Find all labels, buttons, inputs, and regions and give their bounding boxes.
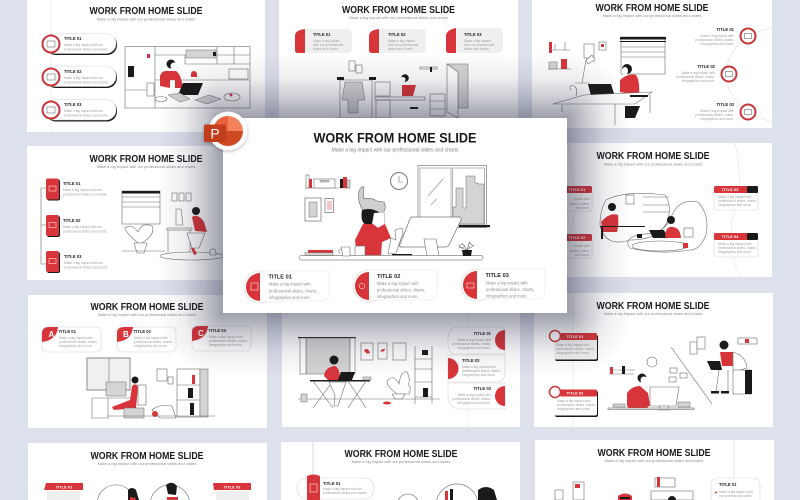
cards: curved list on right: professional slides, charts,	[462, 369, 501, 373]
list: circular icons on right: infographics and more.	[681, 79, 715, 83]
cards: three red tabbed: slides and charts	[388, 47, 413, 51]
panel: slide bottom right: Make a big impact with our professional slides and charts	[605, 458, 703, 463]
card: title 01: Make a big impact with	[269, 282, 311, 286]
cards: labeled red headers: slides, charts,	[570, 202, 590, 206]
cards: labeled red headers: impact with	[574, 244, 590, 248]
cards: three red tabbed: with our professional	[464, 43, 495, 47]
cards: labeled red headers: TITLE 01	[569, 187, 586, 192]
list: circular icons on right: Make a big impact with	[700, 34, 734, 38]
cards: red title bars: TITLE 03	[224, 484, 241, 490]
card: title 02: infographics and more.	[377, 294, 419, 299]
list: circular icons on right: professional slides, charts,	[695, 38, 734, 42]
cards: three red tabbed: slides and charts	[313, 47, 338, 51]
desk	[299, 256, 483, 260]
potted plant	[459, 241, 474, 256]
card: title 02: TITLE 02	[377, 274, 400, 280]
illustration: woman at desk with plant	[122, 191, 224, 260]
panel: slide lower left: WORK FROM HOME SLIDE	[90, 302, 204, 313]
list: three pill cards: professional slides and charts	[64, 48, 108, 52]
panel: slide bottom right: WORK FROM HOME SLIDE	[598, 448, 711, 459]
card: title 03: TITLE 03	[486, 273, 509, 279]
cards: A B C: B	[123, 330, 129, 339]
list: three pill cards: Make a big impact with our	[64, 76, 104, 80]
card: title 01: infographics and more.	[269, 295, 311, 300]
card: red tag with title: TITLE 01	[323, 481, 341, 486]
cards: labeled red headers: slides, charts,	[570, 249, 590, 253]
illustration: two workers with shelves	[608, 337, 757, 410]
card: bulleted list: our professional slides	[719, 494, 752, 498]
panel: slide lower center	[282, 300, 520, 427]
wall clock	[390, 172, 408, 190]
card: red tag with title	[297, 474, 374, 500]
cards: three red tabbed	[295, 28, 503, 53]
panel: slide top right: Make a big impact with our professional slides and charts	[603, 13, 701, 18]
cards: A B C: TITLE 01	[58, 329, 77, 334]
cards: A B C: A	[48, 330, 54, 339]
panel: slide top left	[27, 0, 265, 132]
cards: labeled red headers: and more.	[575, 253, 590, 257]
card: title 01: professional slides, charts,	[269, 288, 317, 294]
cards: curved list on right: TITLE 02	[462, 358, 480, 363]
title: WORK FROM HOME SLIDE	[314, 130, 476, 146]
list: red square icons: TITLE 02	[63, 218, 81, 223]
cards: red headers with round icons: TITLE 01	[567, 334, 584, 339]
cards: curved list on right: Make a big impact with	[457, 393, 491, 397]
card: title 02: professional slides, charts,	[377, 288, 425, 292]
list: three pill cards: professional slides and charts	[64, 114, 108, 118]
panel: slide top right	[532, 0, 772, 128]
card: title 01: TITLE 01	[268, 274, 292, 280]
illustration: person at desk with dog and bookcase	[87, 358, 215, 418]
cards: red headers with round icons: infographics and more.	[557, 407, 591, 411]
cards: curved list on right: infographics and more.	[462, 373, 496, 377]
list: circular icons on right: infographics and more.	[700, 117, 734, 121]
cards: red headers with round icons: professional slides, charts,	[556, 347, 595, 351]
illustration: two people working in blobs	[600, 193, 707, 252]
list: circular icons on right: TITLE 03	[717, 102, 735, 107]
panel: slide top center: WORK FROM HOME SLIDE	[342, 5, 455, 16]
panel: slide bottom center: WORK FROM HOME SLIDE	[344, 449, 458, 460]
cards: A B C: infographics and more.	[134, 344, 168, 348]
cards: labeled red headers: TITLE 04	[722, 234, 739, 239]
cards: three red tabbed: Make a big impact	[388, 39, 415, 43]
cards: labeled red headers	[560, 186, 758, 258]
list: three pill cards: Make a big impact with our	[64, 43, 104, 47]
cards: red headers with round icons	[550, 330, 598, 417]
illustration: two people in circles	[97, 483, 189, 500]
list: red square icons: professional slides and charts	[64, 266, 108, 270]
panel: slide top center	[279, 0, 518, 122]
list: circular icons on right: infographics and more.	[700, 42, 734, 46]
cards: three red tabbed: slides and charts	[464, 47, 489, 51]
cards: A B C: infographics and more.	[59, 344, 93, 348]
wall shelf with books	[305, 175, 350, 188]
cards: A B C: professional slides, charts,	[209, 339, 248, 343]
list: circular icons on right: professional slides, charts,	[695, 113, 734, 117]
subtitle: Make a big impact with our professional slides and charts	[332, 148, 459, 154]
icon: PowerPoint logo: P	[210, 126, 220, 142]
cards: curved list on right: TITLE 01	[474, 331, 492, 336]
list: red square icons: TITLE 01	[63, 181, 81, 186]
list: circular icons on right: TITLE 01	[717, 27, 735, 32]
list: red square icons: professional slides and charts	[63, 230, 107, 234]
panel: slide middle right	[534, 143, 772, 277]
cards: A B C: professional slides, charts,	[59, 340, 98, 344]
cards: red headers with round icons: professional slides, charts,	[557, 403, 596, 407]
cards: three red tabbed: Make a big impact	[464, 39, 491, 43]
card: title 02	[353, 270, 437, 302]
panel: slide middle right: WORK FROM HOME SLIDE	[596, 151, 710, 162]
cards: three red tabbed: with our professional	[313, 43, 344, 47]
cards: labeled red headers: impact with	[574, 197, 590, 201]
cards: curved list on right: Make a big impact with	[457, 338, 491, 342]
list: circular icons on right: Make a big impact with	[700, 109, 734, 113]
cards: labeled red headers: and more.	[575, 206, 590, 210]
card: title 01	[244, 271, 329, 303]
cards: red headers with round icons: TITLE 02	[567, 390, 584, 396]
cards: A B C: professional slides, charts,	[134, 340, 173, 344]
cards: three red tabbed: TITLE 02	[388, 32, 406, 37]
cards: curved list on right: professional slides, charts,	[452, 342, 491, 346]
panel: slide top left: Make a big impact with our professional slides and charts	[97, 16, 195, 22]
cards: labeled red headers: professional slides, charts,	[718, 246, 757, 250]
illustration: shelf and person	[555, 477, 693, 500]
cards: three red tabbed: TITLE 01	[313, 32, 331, 37]
illustration: woman with cat on head at computer	[299, 166, 490, 260]
list: red square icons: Make a big impact with our	[64, 261, 104, 265]
panel: slide bottom center	[281, 442, 520, 500]
window with city view	[418, 166, 490, 228]
list: red square icons: Make a big impact with our	[63, 225, 103, 229]
list: red square icons	[46, 178, 108, 273]
cards: A B C: Make a big impact with	[134, 336, 168, 340]
list: three pill cards	[42, 34, 117, 122]
cards: curved list on right	[448, 327, 505, 409]
panel: slide bottom center: Make a big impact with our professional slides and charts	[352, 459, 450, 464]
panel: slide lower left	[28, 295, 267, 428]
cards: three red tabbed: TITLE 03	[464, 32, 482, 37]
cards: A B C: TITLE 03	[208, 328, 227, 333]
card: bulleted list	[711, 478, 760, 500]
cards: curved list on right: infographics and more.	[457, 346, 491, 350]
cards: A B C: C	[198, 329, 204, 338]
panel: slide middle left: Make a big impact with our professional slides and charts	[97, 164, 195, 169]
illustration: clothes rack and home desk	[335, 61, 468, 118]
panel: slide middle right: Make a big impact with our professional slides and charts	[604, 162, 702, 166]
panel: featured work from home slide	[223, 118, 567, 313]
card: title 03: Make a big impact with	[486, 280, 528, 286]
cards: labeled red headers: TITLE 03	[722, 187, 739, 192]
cards: A B C	[42, 326, 251, 352]
panel: slide lower left: Make a big impact with our professional slides and charts	[98, 312, 196, 317]
card: title 03: professional slides, charts,	[486, 287, 534, 292]
cards: red headers with round icons: infographics and more.	[556, 351, 590, 355]
cards: curved list on right: Make a big impact with	[462, 365, 496, 369]
list: three pill cards: TITLE 01	[64, 36, 82, 41]
list: three pill cards: TITLE 03	[64, 102, 82, 107]
card: red tag with title: Make a big impact with our	[323, 487, 363, 491]
illustration: woman at desk with plant and shelf	[298, 337, 440, 408]
card: bulleted list: Make a big impact with	[719, 490, 753, 494]
cards: curved list on right: TITLE 03	[474, 386, 492, 391]
panel: slide middle left: WORK FROM HOME SLIDE	[90, 154, 203, 165]
cards: A B C: Make a big impact with	[209, 335, 243, 339]
panel: slide bottom left: Make a big impact with our professional slides and charts	[98, 461, 196, 466]
card: bulleted list: TITLE 01	[719, 482, 737, 487]
card: red tag with title: professional slides and charts	[323, 491, 367, 495]
cards: A B C: Make a big impact with	[59, 336, 93, 340]
cards: three red tabbed: with our professional	[388, 43, 419, 47]
panel: slide bottom left	[28, 443, 267, 500]
cards: three red tabbed: Make a big impact	[313, 39, 340, 43]
list: circular icons on right: professional slides, charts,	[676, 75, 715, 79]
card: title 02: Make a big impact with	[377, 281, 419, 286]
panel: slide lower right	[534, 293, 773, 427]
list: circular icons on right: TITLE 02	[698, 64, 716, 69]
cards: labeled red headers: TITLE 02	[569, 235, 586, 240]
cards: A B C: infographics and more.	[209, 343, 243, 347]
list: circular icons on right: Make a big impact with	[681, 71, 715, 75]
cards: labeled red headers: infographics and more.	[718, 250, 752, 254]
illustration: woman at laptop by window	[548, 37, 666, 125]
cards: curved list on right: infographics and more.	[457, 401, 491, 405]
cards: red headers with round icons: Make a big impact with	[556, 343, 590, 347]
cards: labeled red headers: Make a big impact with	[718, 242, 752, 246]
panel: slide lower right: WORK FROM HOME SLIDE	[596, 301, 710, 312]
cards: labeled red headers: infographics and more.	[718, 203, 752, 207]
list: red square icons: Make a big impact with our	[63, 188, 103, 192]
illustration: kitchen with man and laptop	[125, 46, 250, 108]
cards: red title bars	[44, 483, 251, 500]
list: red square icons: professional slides and charts	[63, 192, 107, 196]
card: title 03: infographics and more.	[486, 294, 528, 298]
cards: labeled red headers: Make a big impact with	[718, 195, 752, 199]
panel: slide top left: WORK FROM HOME SLIDE	[90, 6, 203, 17]
cards: labeled red headers: professional slides, charts,	[718, 199, 757, 203]
list: circular icons on right	[676, 27, 756, 121]
panel: slide top center: Make a big impact with our professional slides and charts	[349, 15, 448, 20]
featured slide shadow	[158, 53, 632, 378]
cards: A B C: TITLE 02	[134, 329, 152, 334]
books and mug	[305, 247, 350, 256]
list: three pill cards: professional slides and charts	[64, 80, 108, 84]
list: three pill cards: TITLE 02	[64, 69, 82, 74]
woman	[355, 209, 403, 256]
picture frames	[305, 198, 334, 221]
panel: slide bottom right	[535, 440, 774, 500]
panel: slide top right: WORK FROM HOME SLIDE	[596, 3, 709, 14]
cat	[358, 187, 385, 213]
list: three pill cards: Make a big impact with our	[64, 109, 104, 113]
list: red square icons: TITLE 03	[64, 254, 82, 259]
illustration: people and bubbles	[398, 484, 497, 500]
icon: PowerPoint logo	[204, 112, 248, 150]
cards: red title bars: TITLE 01	[56, 484, 73, 490]
cards: red headers with round icons: Make a big impact with	[557, 399, 591, 403]
computer monitor	[392, 217, 461, 256]
cards: curved list on right: professional slides, charts,	[452, 397, 491, 401]
panel: slide middle left	[27, 146, 265, 280]
card: title 03	[461, 269, 545, 301]
panel: slide bottom left: WORK FROM HOME SLIDE	[90, 451, 204, 462]
panel: slide lower right: Make a big impact with our professional slides and charts	[604, 311, 702, 316]
